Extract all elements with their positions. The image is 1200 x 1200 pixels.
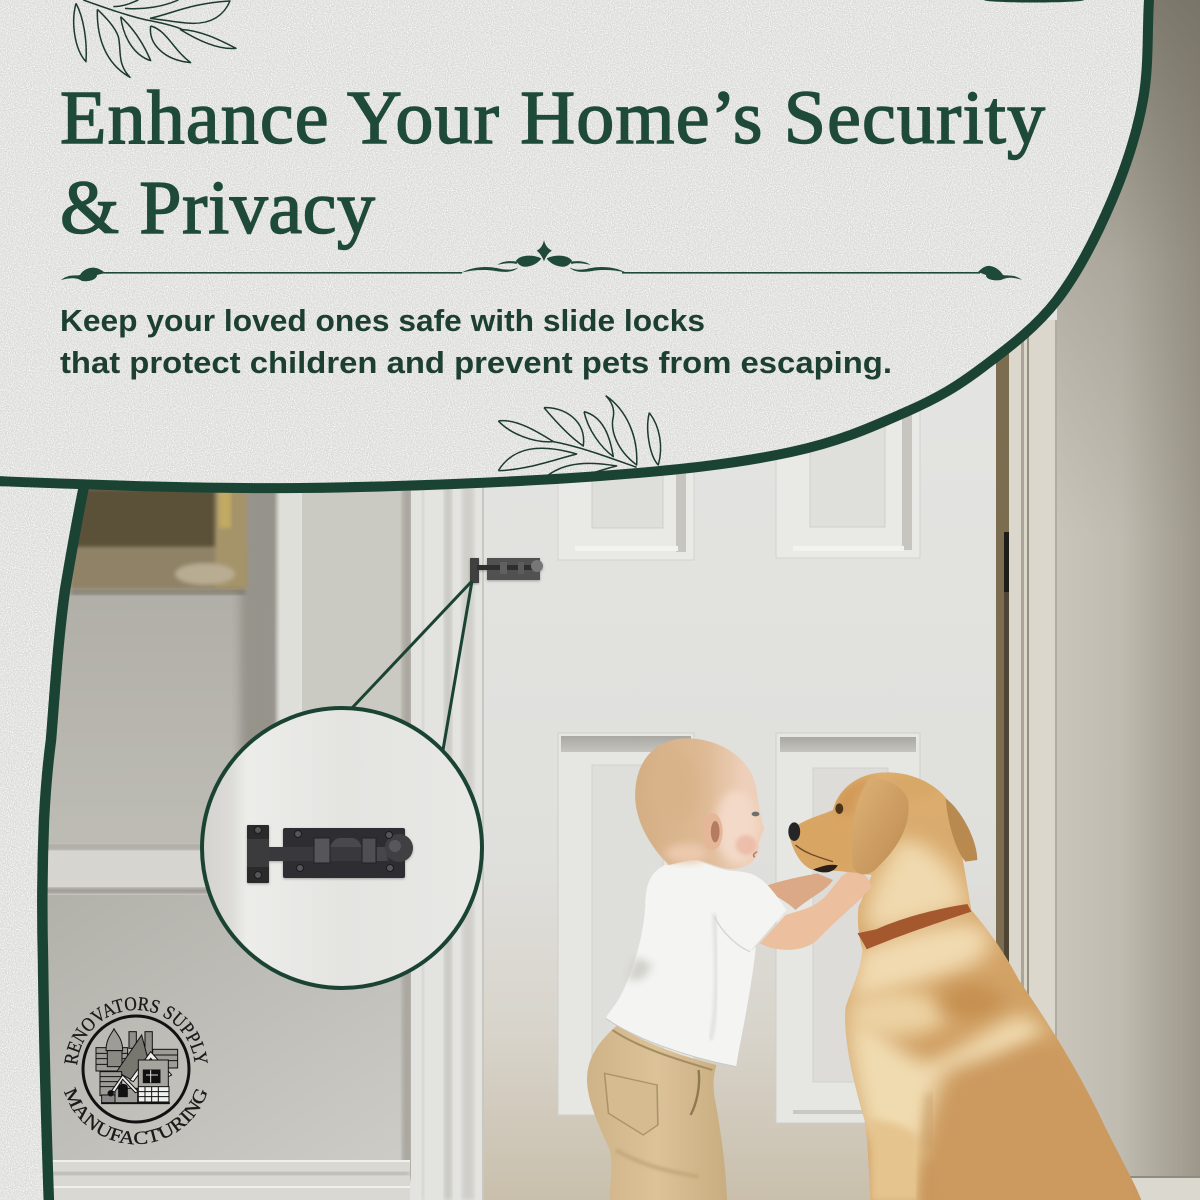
dog coat shading [790, 773, 1153, 1200]
callout lines from lock to magnifier [352, 581, 472, 750]
dog [788, 772, 1153, 1200]
logo lower arc text: MANUFACTURING [64, 1086, 207, 1145]
door [484, 400, 998, 1200]
door panel: lower right [776, 733, 920, 1123]
child [587, 738, 870, 1200]
child arms [760, 870, 870, 950]
child t-shirt [606, 860, 786, 1067]
logo upper arc text: RENOVATORS SUPPLY [64, 997, 208, 1065]
child hand on dog [840, 874, 872, 896]
dog collar [858, 904, 971, 949]
dog nose and face details [788, 803, 843, 872]
door panel: upper right [776, 400, 920, 558]
ornamental divider [61, 240, 1022, 281]
panel border [0, 0, 1149, 488]
logo house illustration [96, 1028, 178, 1104]
left wall [0, 480, 413, 1200]
subheading text [60, 304, 892, 380]
top edge accent [984, 0, 1084, 2]
left textured strip [0, 486, 89, 1200]
child trousers [587, 1025, 727, 1200]
door panel: lower left [558, 733, 694, 1115]
framed picture on wall [70, 488, 247, 595]
door panel: upper left [558, 430, 694, 560]
leaf sprig: bottom [498, 396, 661, 475]
enlarged slide lock [247, 825, 413, 883]
subheading line 1: Keep your loved ones safe with slide locks [60, 304, 705, 338]
leaf sprig: top [74, 0, 236, 77]
right door frame and wall [996, 0, 1200, 1200]
subheading line 2: that protect children and prevent pets from escaping. [60, 346, 892, 380]
magnifier circle with enlarged slide lock [202, 708, 482, 988]
heading line 1: Enhance Your Home’s Security [60, 76, 1045, 160]
child head [635, 738, 764, 869]
small slide lock on door [470, 558, 543, 583]
top textured panel [0, 0, 1160, 495]
dog front ear [851, 778, 909, 874]
left door casing [411, 480, 486, 1200]
heading [60, 76, 1045, 250]
dog body [789, 772, 1141, 1200]
logo: Renovators Supply Manufacturing [64, 997, 208, 1145]
dog back ear [946, 798, 977, 862]
heading line 2: & Privacy [60, 166, 375, 250]
